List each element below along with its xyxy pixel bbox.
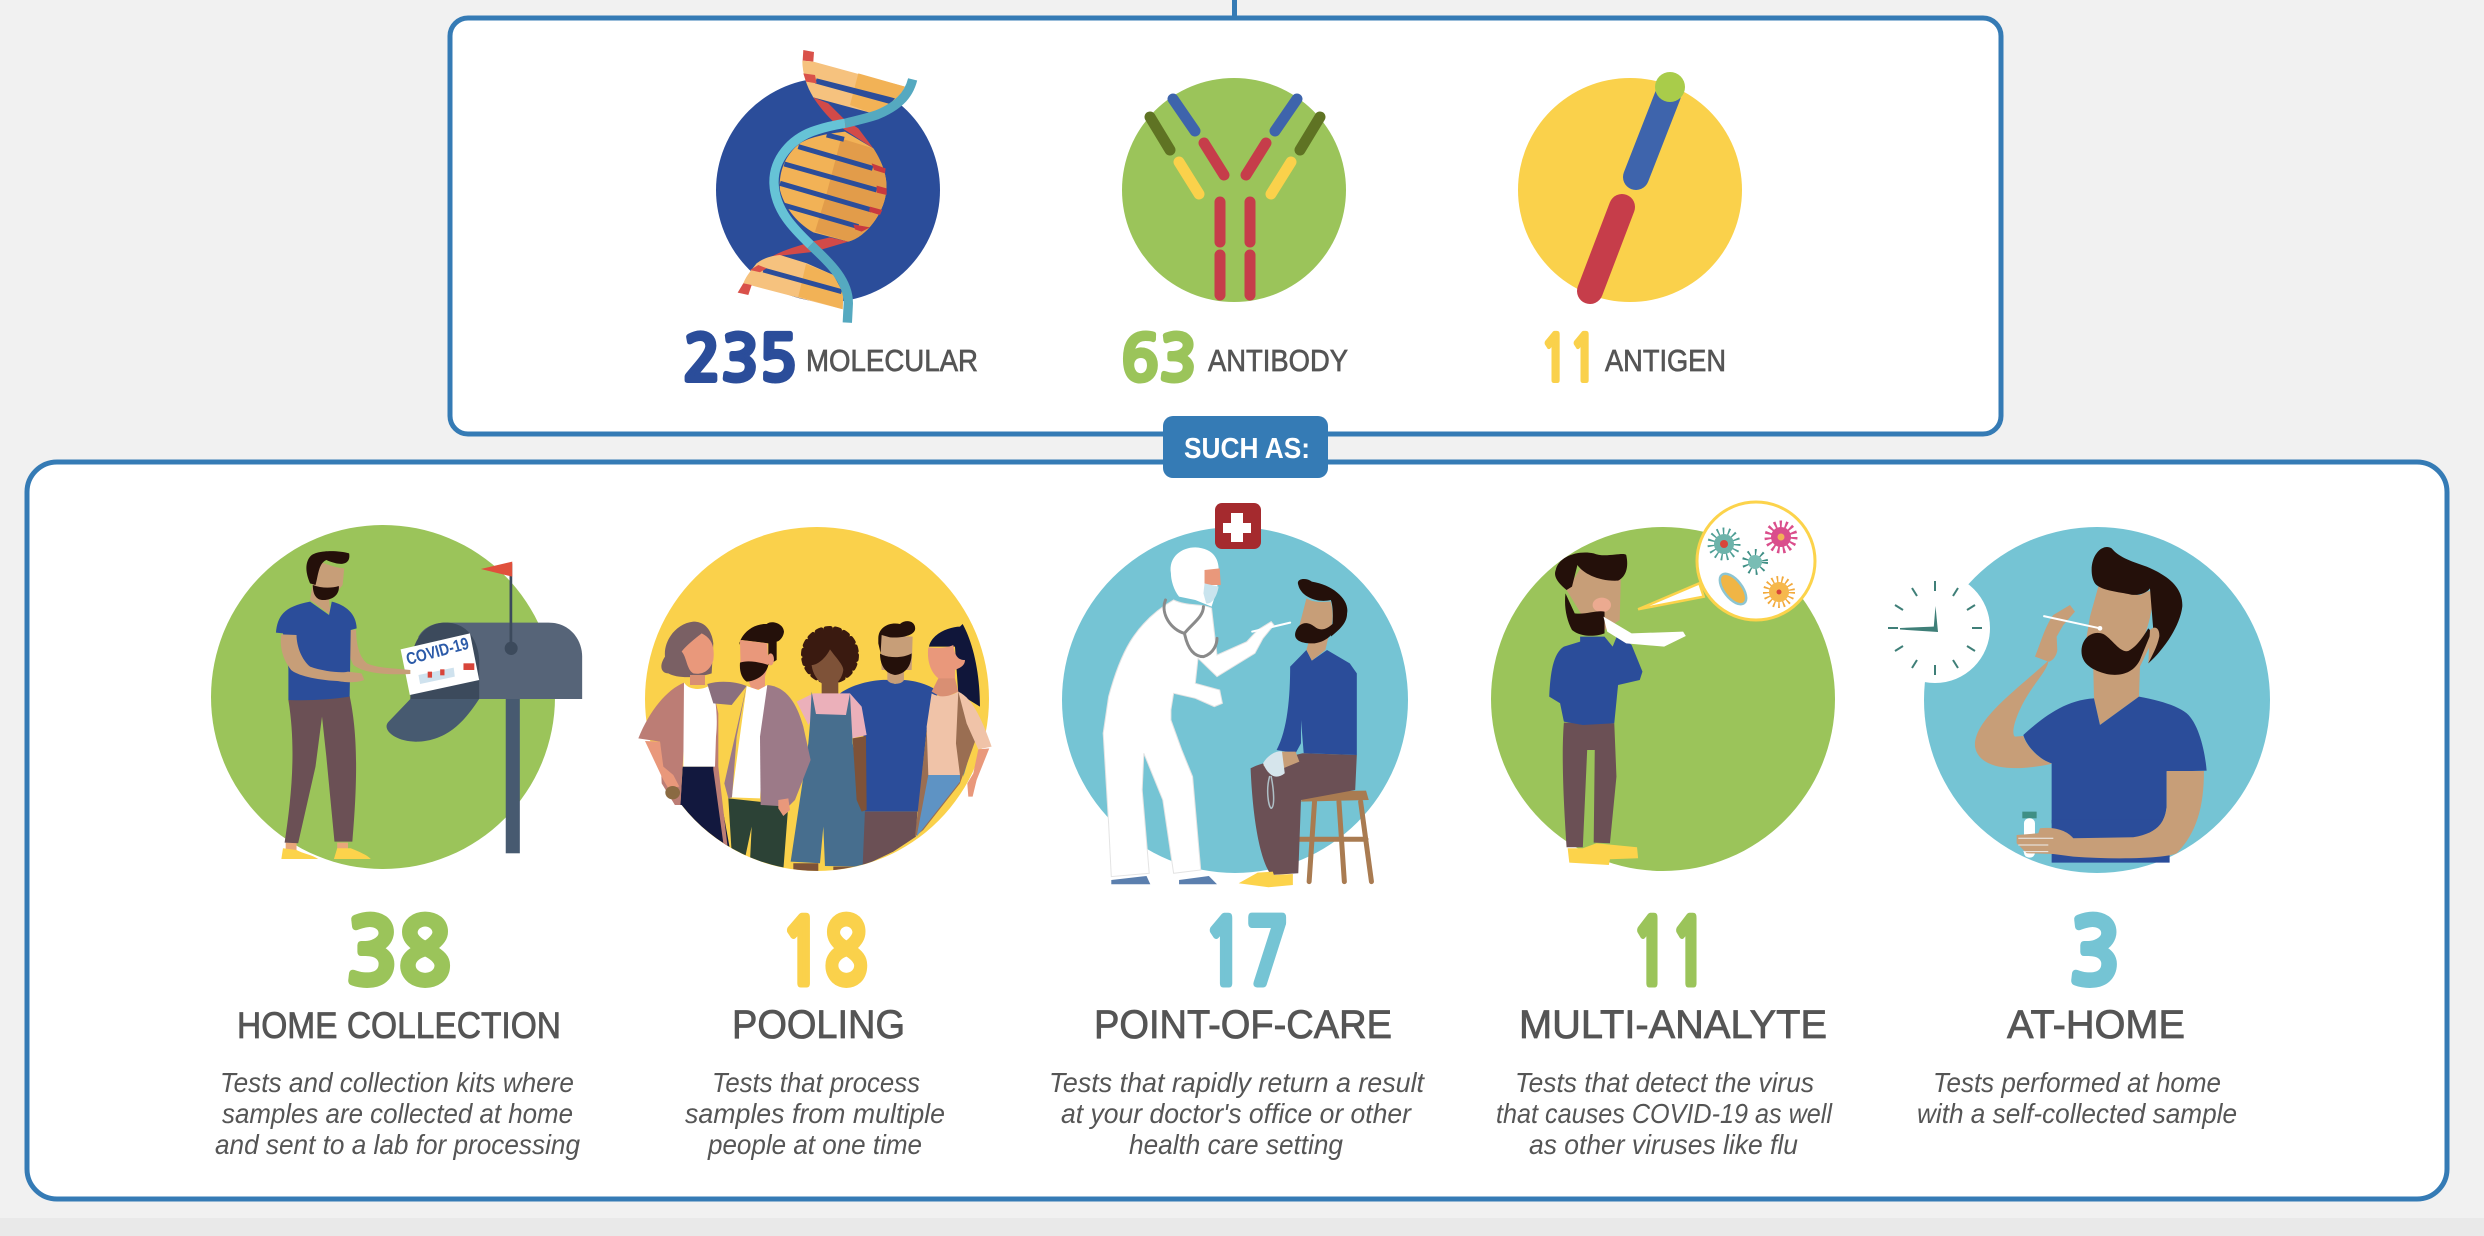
stat: molecular: MOLECULAR xyxy=(806,343,978,378)
column text: point-of-care: at your doctor's office or other xyxy=(1061,1098,1413,1129)
column text: pooling xyxy=(685,909,945,1160)
figure: man with bun xyxy=(707,622,811,870)
stat: antigen: ANTIGEN xyxy=(1605,343,1726,378)
column text: point-of-care: 17 xyxy=(1203,909,1289,998)
stat: antigen xyxy=(1540,329,1726,391)
column text: multi-analyte: Tests that detect the virus xyxy=(1515,1067,1814,1098)
column text: multi-analyte: that causes COVID-19 as well xyxy=(1496,1098,1833,1129)
column text: multi-analyte xyxy=(1496,909,1833,1160)
stat: antibody xyxy=(1121,329,1348,391)
column text: home collection xyxy=(215,909,580,1160)
column text: at-home: AT-HOME xyxy=(2007,1003,2185,1047)
column text: at-home: with a self-collected sample xyxy=(1917,1098,2237,1129)
icon: clock xyxy=(1880,573,1990,683)
stat: molecular: 235 xyxy=(683,329,797,391)
stat: antibody: ANTIBODY xyxy=(1208,343,1348,378)
column text: at-home: 3 xyxy=(2069,909,2121,998)
column text: pooling: POOLING xyxy=(732,1003,905,1047)
icon: bacterium xyxy=(1715,569,1751,609)
column text: at-home xyxy=(1917,909,2237,1129)
figure: woman in cardigan xyxy=(638,622,731,855)
column text: home collection: HOME COLLECTION xyxy=(237,1005,561,1046)
badge: such as xyxy=(1163,416,1328,478)
icon: molecular DNA xyxy=(716,50,940,323)
icon: medical cross xyxy=(1215,503,1261,549)
label: COVID-19 test card: COVID-19 xyxy=(404,634,471,669)
illustration: home collection xyxy=(211,525,582,869)
illustration: point-of-care xyxy=(1062,503,1408,887)
column text: at-home: Tests performed at home xyxy=(1933,1067,2221,1098)
column text: point-of-care xyxy=(1049,909,1425,1160)
panel: test categories xyxy=(27,462,2447,1199)
callout: viruses bubble xyxy=(1697,502,1815,620)
icon: teal virus xyxy=(1712,532,1736,556)
stat: molecular xyxy=(683,329,978,391)
column text: home collection: Tests and collection kits where xyxy=(220,1067,574,1098)
icon: pink virus xyxy=(1769,525,1793,549)
connector line xyxy=(1232,0,1237,18)
column text: home collection: 38 xyxy=(346,909,451,998)
icon: orange virus xyxy=(1767,580,1791,604)
illustration: at-home xyxy=(1880,527,2270,873)
illustration: multi-analyte xyxy=(1491,502,1835,871)
badge: such as: SUCH AS: xyxy=(1184,433,1310,465)
figure: woman with long hair xyxy=(915,624,992,837)
column text: point-of-care: Tests that rapidly return a result xyxy=(1049,1067,1425,1098)
column text: home collection: and sent to a lab for processing xyxy=(215,1129,580,1160)
stat: antibody: 63 xyxy=(1121,329,1197,391)
column text: multi-analyte: MULTI-ANALYTE xyxy=(1519,1003,1827,1047)
column text: multi-analyte: 11 xyxy=(1631,909,1709,998)
panel: test types xyxy=(450,18,2001,434)
column text: point-of-care: health care setting xyxy=(1129,1129,1343,1160)
column text: home collection: samples are collected at home xyxy=(222,1098,573,1129)
icon: small virus xyxy=(1746,553,1764,571)
icon: antigen xyxy=(1518,72,1742,302)
column text: point-of-care: POINT-OF-CARE xyxy=(1094,1003,1392,1047)
figure: bearded man in blue xyxy=(840,621,938,867)
figure: woman in overalls xyxy=(791,628,867,880)
column text: pooling: 18 xyxy=(780,909,868,998)
stat: antigen: 11 xyxy=(1540,329,1598,391)
column text: pooling: samples from multiple xyxy=(685,1098,945,1129)
icon: antibody xyxy=(1122,78,1346,302)
column text: multi-analyte: as other viruses like flu xyxy=(1529,1129,1798,1160)
column text: pooling: people at one time xyxy=(707,1129,922,1160)
column text: pooling: Tests that process xyxy=(712,1067,920,1098)
illustration: pooling xyxy=(638,527,992,880)
